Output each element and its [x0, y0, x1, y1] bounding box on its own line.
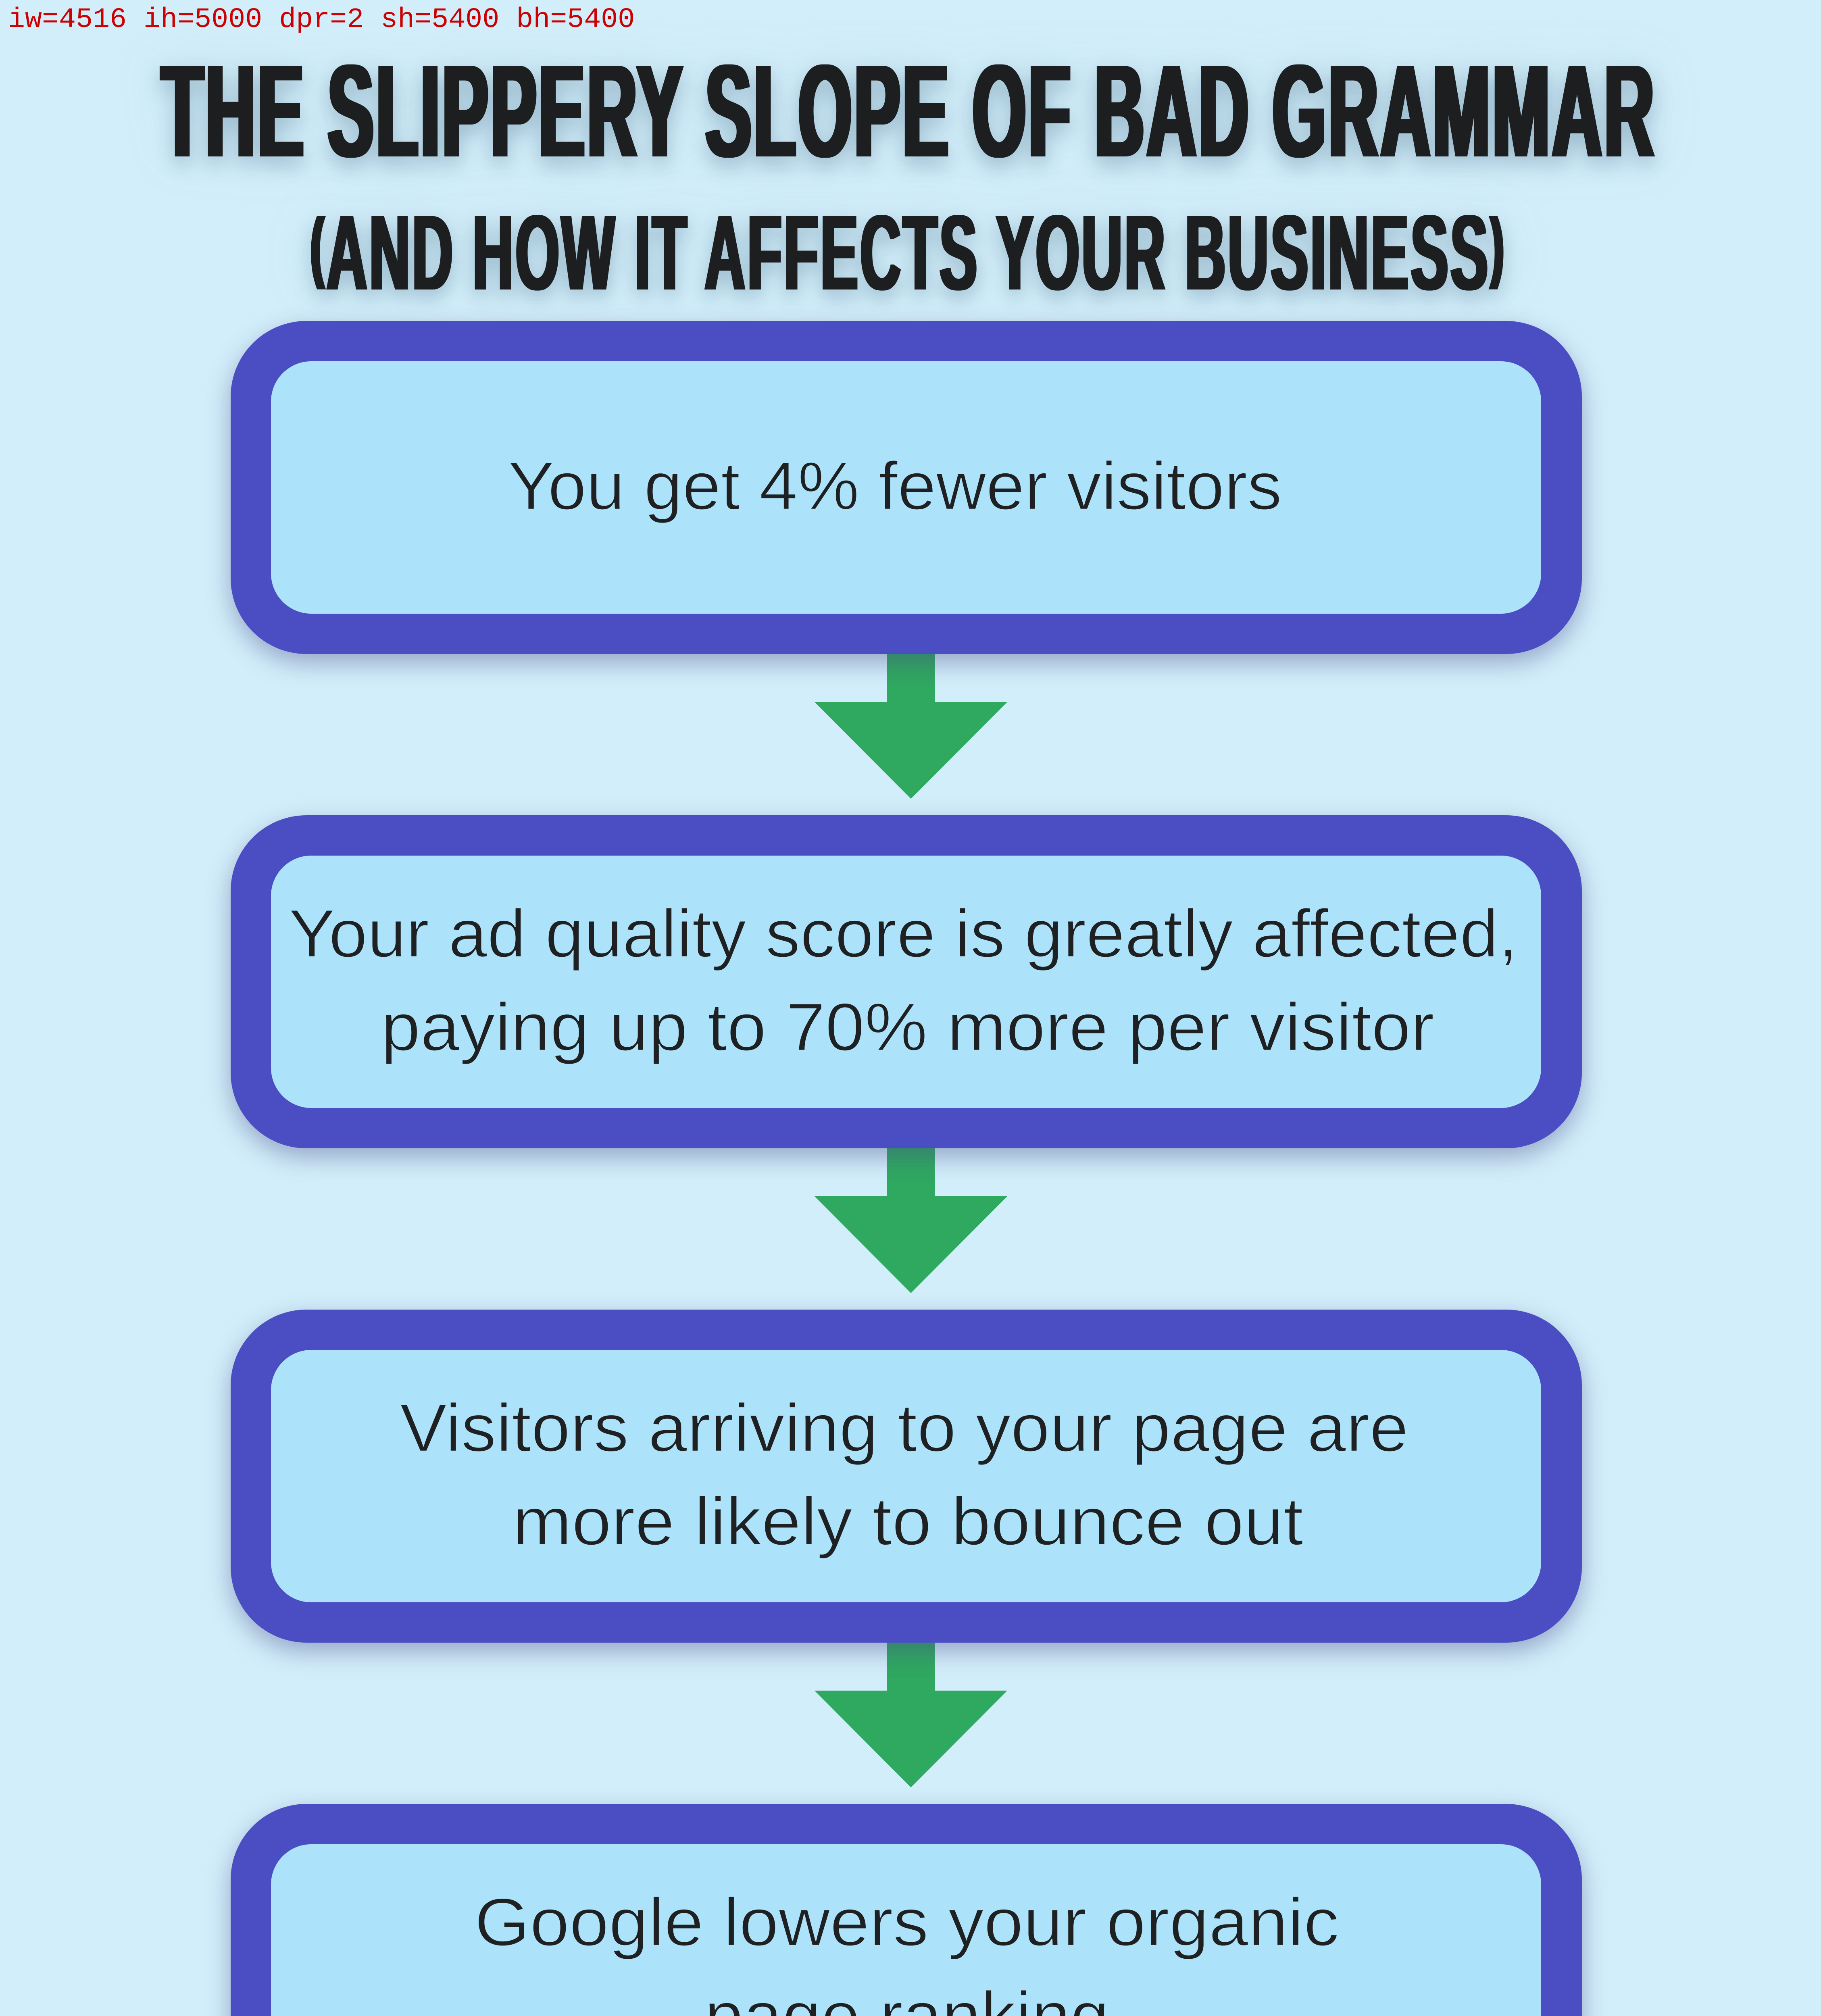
text: ad quality score: Your ad quality score is greatly affected,	[289, 896, 1518, 971]
arrow: step 3 to step 4	[815, 1634, 1007, 1787]
text: bounce out	[400, 1390, 1408, 1559]
title	[161, 37, 1656, 312]
text: bounce out: more likely to bounce out	[513, 1483, 1303, 1559]
text: organic page ranking: Google lowers your organic	[475, 1884, 1339, 1960]
panel: step 4	[231, 1804, 1582, 2016]
text: fewer visitors: You get 4% fewer visitors	[508, 448, 1282, 524]
arrow: step 1 to step 2	[815, 645, 1007, 799]
text: organic page ranking	[475, 1884, 1339, 2016]
panel: step 3	[231, 1310, 1582, 1643]
panel: step 2	[231, 815, 1582, 1148]
text: ad quality score: paying up to 70% more per visitor	[381, 989, 1434, 1065]
text: iw=4516 ih=5000 dpr=2 sh=5400 bh=5400	[8, 4, 635, 36]
panel: step 1	[231, 321, 1582, 654]
text: bounce out: Visitors arriving to your page are	[400, 1390, 1408, 1466]
subheading: (	[310, 202, 327, 290]
subheading: )	[1490, 202, 1506, 290]
text: ad quality score	[289, 896, 1518, 1065]
arrow: step 2 to step 3	[815, 1139, 1007, 1293]
